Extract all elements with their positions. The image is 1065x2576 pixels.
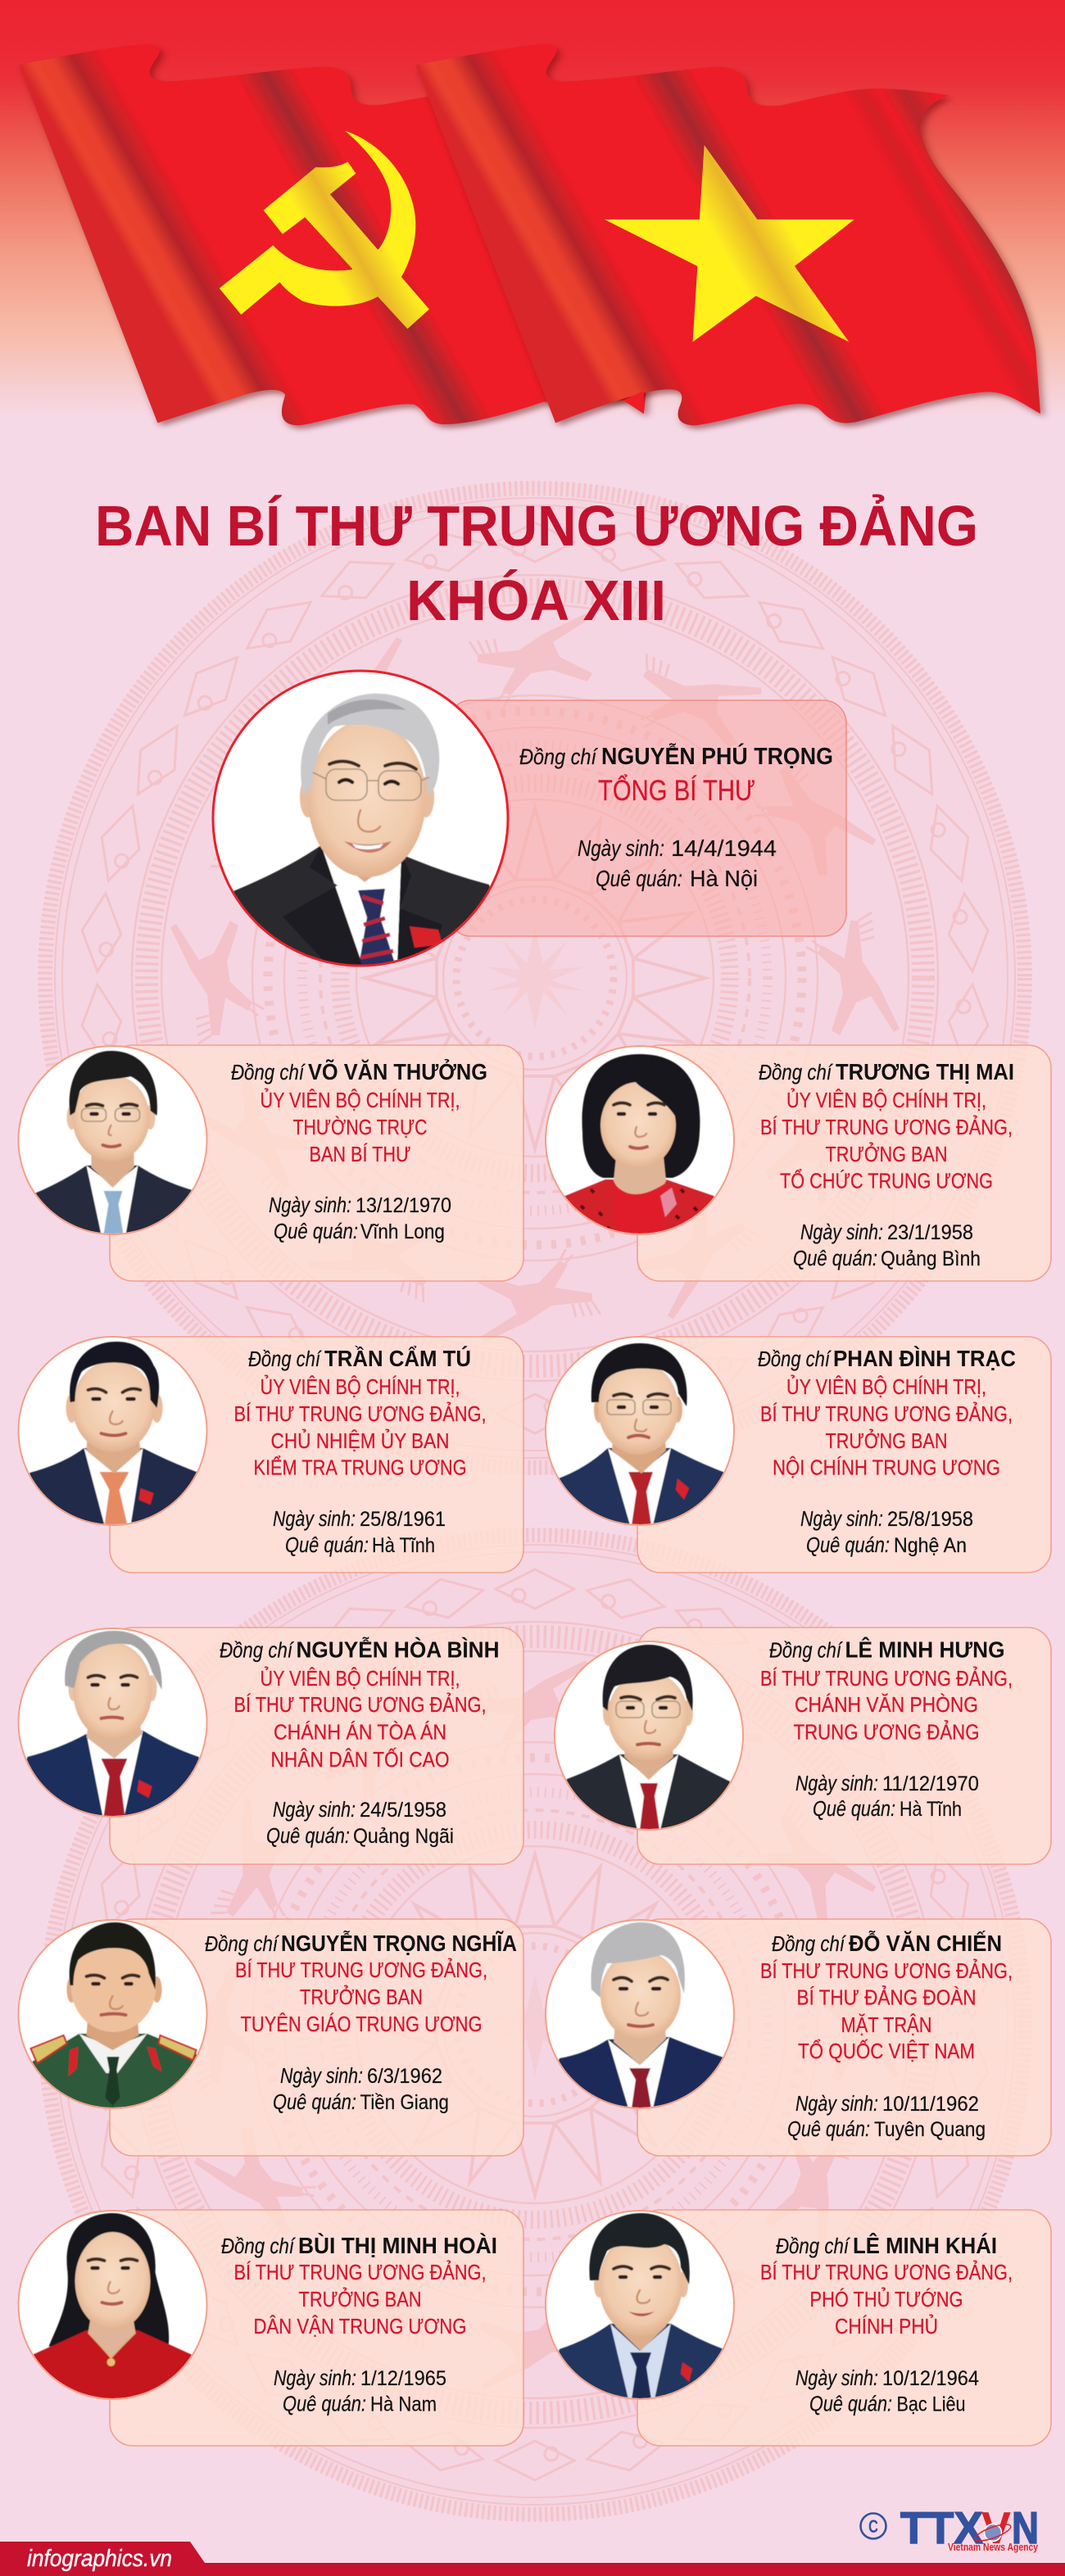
birth date and hometown: Quê quán:: [285, 1534, 369, 1557]
birth date and hometown: Tuyên Quang: [874, 2118, 986, 2141]
name: TRƯƠNG THỊ MAI: [836, 1059, 1014, 1084]
role: BÍ THƯ TRUNG ƯƠNG ĐẢNG,: [760, 1401, 1013, 1426]
name: NGUYỄN TRỌNG NGHĨA: [281, 1931, 517, 1956]
portrait: Phan Đình Trạc: [537, 1337, 742, 1525]
role: TRƯỞNG BAN: [826, 1142, 947, 1166]
role: ỦY VIÊN BỘ CHÍNH TRỊ,: [786, 1374, 986, 1399]
birth date and hometown: Ngày sinh:: [269, 1194, 351, 1217]
name: [759, 1059, 1014, 1084]
portrait: Nguyễn Phú Trọng: [205, 670, 516, 974]
birth date and hometown: Hà Nội: [690, 866, 758, 891]
site name: infographics.vn: [27, 2546, 172, 2572]
role: TRƯỞNG BAN: [298, 2287, 421, 2311]
name: [776, 2233, 997, 2258]
card: [110, 1628, 523, 1864]
name: [769, 1637, 1004, 1663]
role: [234, 1374, 487, 1479]
birth date and hometown: Quê quán:: [793, 1247, 877, 1270]
panel: Lê Minh Khái: [537, 2210, 1051, 2446]
birth date and hometown: Ngày sinh:: [795, 2367, 878, 2390]
role: BAN BÍ THƯ: [310, 1143, 411, 1166]
birth date and hometown: Tiền Giang: [360, 2091, 449, 2114]
name: [772, 1931, 1002, 1956]
footer bar and tab: [0, 2542, 1065, 2576]
card: [637, 1628, 1051, 1864]
birth date and hometown: [795, 1772, 979, 1821]
name: LÊ MINH KHÁI: [853, 2233, 997, 2258]
birth date and hometown: Hà Nam: [370, 2393, 437, 2416]
birth date and hometown: [800, 1508, 973, 1557]
birth date and hometown: Quê quán:: [274, 1220, 358, 1243]
name: [205, 1931, 517, 1956]
birth date and hometown: Quê quán:: [813, 1798, 895, 1821]
icon: hammer and sickle: [220, 131, 429, 329]
card: [110, 1045, 523, 1281]
birth date and hometown: Quê quán:: [283, 2393, 366, 2416]
role: [760, 2260, 1013, 2338]
name: [758, 1346, 1016, 1371]
title: [95, 494, 978, 632]
TTX letters: TTX: [900, 2502, 983, 2553]
name: Đồng chí: [759, 1062, 834, 1084]
role: TRUNG ƯƠNG ĐẢNG: [793, 1720, 980, 1745]
panel: Phan Đình Trạc: [537, 1337, 1051, 1573]
birth date and hometown: [795, 2367, 979, 2416]
card: [637, 2210, 1051, 2446]
role: TỔNG BÍ THƯ: [598, 774, 755, 807]
birth date and hometown: 25/8/1958: [887, 1508, 973, 1531]
role: [760, 1958, 1013, 2063]
portrait: Đỗ Văn Chiến: [537, 1920, 742, 2108]
panel: Võ Văn Thưởng: [10, 1045, 523, 1281]
role: BÍ THƯ TRUNG ƯƠNG ĐẢNG,: [234, 2260, 487, 2284]
role: BÍ THƯ TRUNG ƯƠNG ĐẢNG,: [760, 2260, 1013, 2284]
birth date and hometown: 1/12/1965: [360, 2367, 446, 2390]
name: NGUYỄN HÒA BÌNH: [297, 1637, 500, 1663]
name: Đồng chí: [758, 1348, 832, 1371]
birth date and hometown: Hà Tĩnh: [372, 1534, 435, 1557]
name: ĐỖ VĂN CHIẾN: [849, 1931, 1002, 1956]
birth date and hometown: 14/4/1944: [671, 835, 777, 861]
birth date and hometown: Quê quán:: [273, 2091, 356, 2114]
role: CHÁNH VĂN PHÒNG: [795, 1693, 978, 1717]
role: ỦY VIÊN BỘ CHÍNH TRỊ,: [261, 1374, 460, 1399]
birth date and hometown: [273, 2065, 449, 2114]
watermark: bronze drum pattern upper: [39, 482, 1031, 1474]
portrait: Bùi Thị Minh Hoài: [10, 2211, 215, 2399]
birth date and hometown: Ngày sinh:: [800, 1508, 883, 1531]
title line 1: BAN BÍ THƯ TRUNG ƯƠNG ĐẢNG: [95, 494, 978, 558]
name: Đồng chí: [205, 1933, 280, 1956]
birth date and hometown: Ngày sinh:: [273, 1508, 356, 1531]
birth date and hometown: Hà Tĩnh: [900, 1798, 962, 1821]
name: TRẦN CẨM TÚ: [324, 1346, 471, 1371]
footer band: [0, 2542, 1065, 2576]
birth date and hometown: Quê quán:: [809, 2393, 892, 2416]
card: [637, 1337, 1051, 1573]
card: [448, 700, 846, 936]
birth date and hometown: Ngày sinh:: [274, 2367, 356, 2390]
role: ỦY VIÊN BỘ CHÍNH TRỊ,: [786, 1088, 986, 1112]
card: [110, 2210, 523, 2446]
card: [110, 1919, 523, 2156]
birth date and hometown: Quê quán:: [787, 2118, 870, 2141]
birth date and hometown: [269, 1194, 451, 1243]
agency tagline: Vietnam News Agency: [948, 2541, 1039, 2553]
birth date and hometown: 24/5/1958: [360, 1799, 446, 1822]
panel: Nguyễn Trọng Nghĩa: [10, 1919, 523, 2156]
role: CHÁNH ÁN TÒA ÁN: [274, 1720, 446, 1745]
role: NỘI CHÍNH TRUNG ƯƠNG: [773, 1456, 1000, 1479]
role: PHÓ THỦ TƯỚNG: [809, 2287, 963, 2311]
birth date and hometown: Quê quán:: [596, 866, 682, 891]
name: [231, 1058, 487, 1084]
role: KIỂM TRA TRUNG ƯƠNG: [254, 1456, 467, 1479]
watermark: bronze drum pattern lower: [39, 1528, 1031, 2521]
portrait: Lê Minh Hưng: [546, 1641, 751, 1830]
role: BÍ THƯ TRUNG ƯƠNG ĐẢNG,: [235, 1958, 487, 1982]
role: CHỦ NHIỆM ỦY BAN: [270, 1428, 449, 1453]
name: PHAN ĐÌNH TRẠC: [833, 1346, 1016, 1371]
birth date and hometown: Ngày sinh:: [795, 1772, 878, 1795]
role: [234, 2260, 487, 2338]
panel: Đỗ Văn Chiến: [537, 1919, 1051, 2156]
birth date and hometown: Quê quán:: [806, 1534, 890, 1557]
panel: Trương Thị Mai: [537, 1045, 1051, 1281]
birth date and hometown: Ngày sinh:: [578, 835, 664, 861]
role: DÂN VẬN TRUNG ƯƠNG: [254, 2315, 467, 2338]
birth date and hometown: 10/11/1962: [882, 2093, 979, 2116]
role: [760, 1666, 1013, 1745]
portrait: Nguyễn Trọng Nghĩa: [10, 1920, 215, 2108]
role: [235, 1958, 487, 2036]
birth date and hometown: [793, 1221, 981, 1270]
title line 2: KHÓA XIII: [406, 568, 666, 632]
birth date and hometown: Ngày sinh:: [273, 1799, 356, 1822]
panel: Trần Cẩm Tú: [10, 1337, 523, 1573]
panel: Nguyễn Phú Trọng: [205, 670, 846, 974]
birth date and hometown: 25/8/1961: [360, 1508, 446, 1531]
role: BÍ THƯ TRUNG ƯƠNG ĐẢNG,: [760, 1115, 1013, 1139]
portrait: Võ Văn Thưởng: [10, 1046, 215, 1234]
card: [110, 1337, 523, 1573]
birth date and hometown: Vĩnh Long: [360, 1220, 445, 1243]
name: [221, 2233, 497, 2258]
flags: [19, 44, 1040, 425]
role: BÍ THƯ ĐẢNG ĐOÀN: [796, 1985, 977, 2010]
portrait: Trương Thị Mai: [537, 1046, 742, 1234]
globe and orbit: [973, 2521, 1013, 2544]
birth date and hometown: Nghệ An: [894, 1534, 967, 1557]
birth date and hometown: 13/12/1970: [356, 1194, 451, 1217]
birth date and hometown: Ngày sinh:: [280, 2065, 363, 2088]
panel: Bùi Thị Minh Hoài: [10, 2210, 523, 2446]
birth date and hometown: [787, 2093, 986, 2141]
role: [760, 1088, 1013, 1193]
copyright symbol: [860, 2513, 886, 2539]
role: ỦY VIÊN BỘ CHÍNH TRỊ,: [261, 1666, 460, 1691]
N letter: N: [1012, 2502, 1039, 2553]
birth date and hometown: [273, 1508, 446, 1557]
role: [760, 1374, 1013, 1479]
birth date and hometown: Quê quán:: [266, 1825, 350, 1848]
birth date and hometown: Quảng Bình: [881, 1247, 981, 1270]
birth date and hometown: 11/12/1970: [882, 1772, 979, 1795]
portrait: Nguyễn Hòa Bình: [10, 1628, 215, 1817]
birth date and hometown: [578, 835, 777, 891]
birth date and hometown: Ngày sinh:: [795, 2093, 878, 2116]
name: VÕ VĂN THƯỞNG: [308, 1058, 487, 1084]
name: [248, 1346, 471, 1371]
role: THƯỜNG TRỰC: [293, 1116, 428, 1139]
birth date and hometown: 10/12/1964: [882, 2367, 979, 2390]
birth date and hometown: [274, 2367, 446, 2416]
role: ỦY VIÊN BỘ CHÍNH TRỊ,: [261, 1088, 460, 1112]
birth date and hometown: Quảng Ngãi: [353, 1825, 454, 1848]
name: Đồng chí: [776, 2235, 851, 2258]
role: TRƯỞNG BAN: [826, 1428, 947, 1453]
name: Đồng chí: [769, 1640, 844, 1663]
role: TRƯỞNG BAN: [300, 1985, 423, 2009]
name: Đồng chí: [220, 1640, 295, 1663]
role: TUYÊN GIÁO TRUNG ƯƠNG: [241, 2012, 482, 2036]
copyright symbol: C: [868, 2516, 878, 2537]
top red gradient band: [0, 0, 1065, 418]
birth date and hometown: 23/1/1958: [887, 1221, 973, 1244]
role: MẶT TRẬN: [841, 2013, 932, 2037]
panel: Lê Minh Hưng: [546, 1628, 1051, 1864]
flag: Communist Party: [19, 44, 652, 425]
name: Đồng chí: [772, 1933, 847, 1956]
name: Đồng chí: [231, 1062, 306, 1084]
role: BÍ THƯ TRUNG ƯƠNG ĐẢNG,: [760, 1666, 1013, 1691]
role: BÍ THƯ TRUNG ƯƠNG ĐẢNG,: [234, 1692, 487, 1717]
role: BÍ THƯ TRUNG ƯƠNG ĐẢNG,: [760, 1958, 1013, 1983]
red V: V: [981, 2502, 1011, 2553]
role: TỔ QUỐC VIỆT NAM: [798, 2039, 975, 2063]
logo: TTXVN Vietnam News Agency: [860, 2502, 1039, 2553]
name: Đồng chí: [221, 2235, 297, 2258]
icon: yellow star: [605, 145, 854, 342]
role: [234, 1666, 487, 1772]
name: BÙI THỊ MINH HOÀI: [298, 2233, 497, 2258]
birth date and hometown: 6/3/1962: [367, 2065, 442, 2088]
birth date and hometown: Ngày sinh:: [800, 1221, 883, 1244]
role: CHÍNH PHỦ: [835, 2314, 938, 2338]
role: BÍ THƯ TRUNG ƯƠNG ĐẢNG,: [234, 1401, 487, 1426]
card: [637, 1045, 1051, 1281]
portrait: Lê Minh Khái: [537, 2211, 742, 2399]
role: TỔ CHỨC TRUNG ƯƠNG: [780, 1168, 993, 1193]
flag: Vietnam national flag: [415, 44, 1040, 425]
name: LÊ MINH HƯNG: [845, 1637, 1004, 1663]
portrait: Trần Cẩm Tú: [10, 1337, 215, 1525]
flag fold sliver: [623, 391, 644, 414]
birth date and hometown: Bạc Liêu: [896, 2393, 965, 2416]
role: [261, 1088, 460, 1166]
role: NHÂN DÂN TỐI CAO: [270, 1747, 449, 1772]
name: NGUYỄN PHÚ TRỌNG: [601, 744, 833, 770]
card: [637, 1919, 1051, 2156]
name: Đồng chí: [248, 1348, 323, 1371]
name: Đồng chí: [519, 745, 598, 769]
panel: Nguyễn Hòa Bình: [10, 1628, 523, 1864]
birth date and hometown: [266, 1799, 454, 1848]
